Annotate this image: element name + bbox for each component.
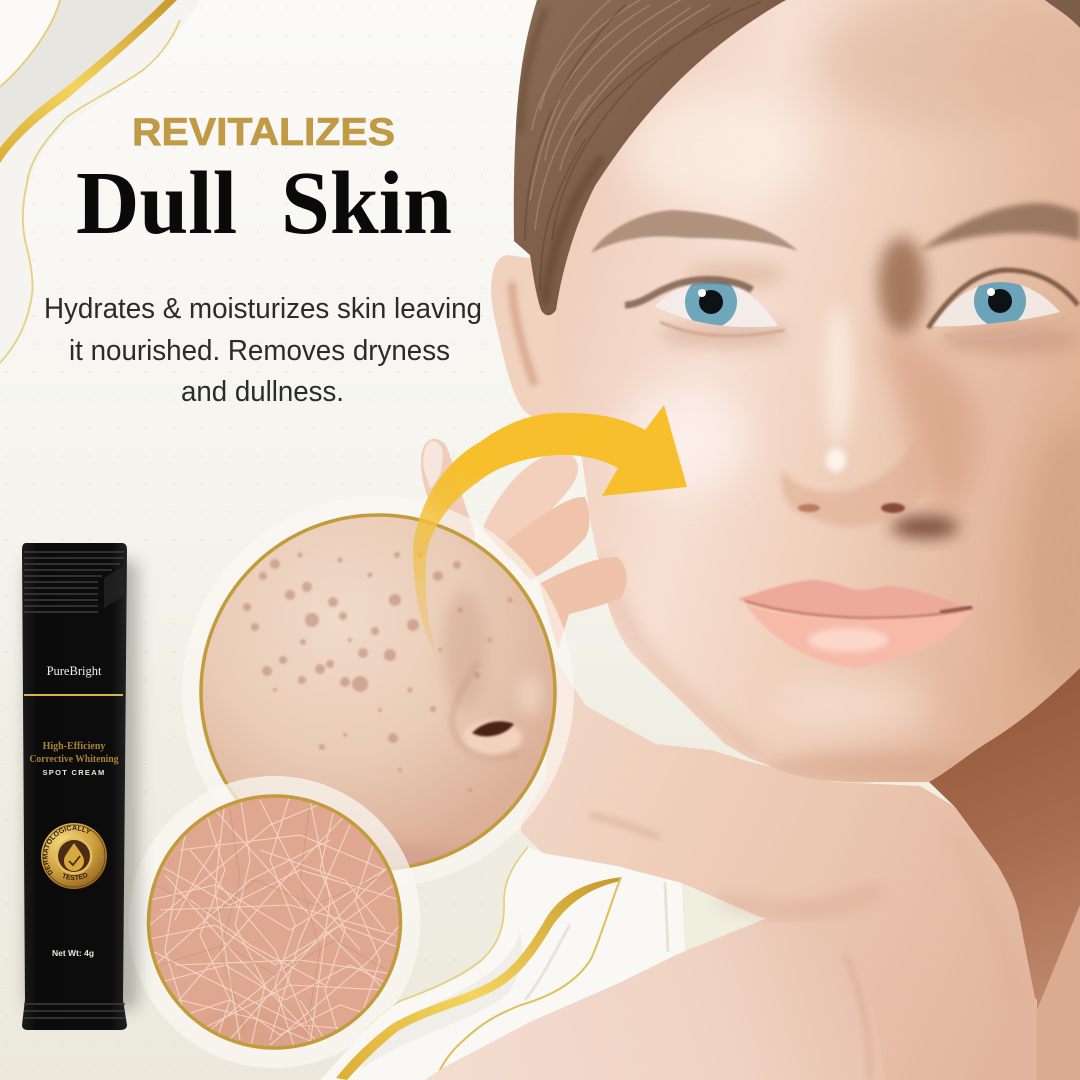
description text <box>44 293 482 408</box>
index finger <box>539 557 627 650</box>
heading: Dull Skin: Dull Skin <box>76 154 452 253</box>
product tube <box>18 543 147 1030</box>
middle finger <box>500 497 590 580</box>
circle: dark spots close-up <box>182 496 574 888</box>
seal: dermatologically tested <box>41 823 107 889</box>
product tube: Corrective Whitening <box>30 754 119 765</box>
face shading <box>820 0 1080 130</box>
decorative waves: bottom centre <box>320 847 760 1080</box>
heading: REVITALIZES: REVITALIZES <box>132 111 395 154</box>
skin cracks <box>145 795 405 1050</box>
seal: dermatologically tested: DERMATOLOGICALLY <box>42 825 91 876</box>
nose highlights <box>824 305 852 445</box>
ring finger <box>482 453 578 560</box>
nostril <box>472 721 514 736</box>
right eyebrow <box>920 203 1080 251</box>
hair <box>514 0 1080 315</box>
net weight: Net Wt: 4g <box>52 948 94 958</box>
nose side shading <box>875 330 979 520</box>
seal: dermatologically tested: TESTED <box>63 872 88 880</box>
far shoulder <box>1030 905 1080 1080</box>
fingers <box>421 439 627 650</box>
product name: High-Efficieny <box>43 741 105 752</box>
little finger <box>421 439 476 560</box>
eye socket shading <box>660 322 790 348</box>
description text: and dullness. <box>181 376 344 408</box>
tube ribs <box>24 552 125 1018</box>
right eye <box>928 270 1078 339</box>
hand and forearm <box>521 660 1037 1080</box>
nose bridge shadow <box>878 237 926 333</box>
shoulder <box>425 860 1037 1080</box>
model portrait <box>421 0 1080 1080</box>
description text: it nourished. Removes dryness <box>69 335 450 367</box>
left eye <box>625 276 785 336</box>
tube highlight <box>104 566 124 608</box>
forearm shading <box>590 815 1015 1080</box>
tube shadow <box>26 560 138 1010</box>
product tube: SPOT CREAM <box>42 768 106 777</box>
gold line <box>24 694 123 696</box>
freckles <box>243 552 512 792</box>
arrow pointing to the cheek <box>413 405 687 662</box>
fingernail <box>423 441 443 488</box>
description text: Hydrates & moisturizes skin leaving <box>44 293 482 325</box>
left eyebrow <box>591 210 798 253</box>
ear <box>491 255 575 426</box>
face <box>556 0 1080 782</box>
nose wing <box>462 720 522 756</box>
brand name: PureBright <box>47 664 102 678</box>
decorative waves: top left <box>0 0 200 363</box>
circle: dry skin close-up <box>128 776 420 1068</box>
lips <box>738 580 972 668</box>
neck <box>925 660 1080 1010</box>
nose tip <box>780 449 924 528</box>
